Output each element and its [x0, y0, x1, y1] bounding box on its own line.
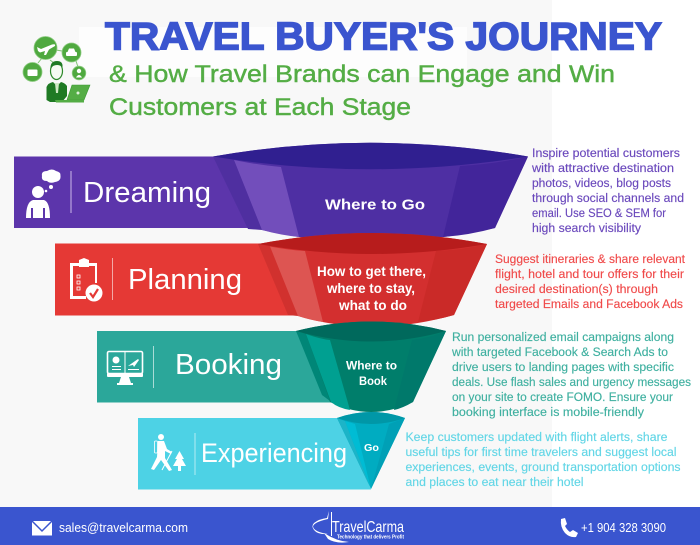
email: sales@travelcarma.com [59, 521, 188, 535]
label: how to get there: How to get there, [317, 264, 426, 279]
icon: booking monitor [107, 352, 143, 385]
label: Where to Go: Where to Go [325, 196, 425, 214]
text: planning description: desired destination(s) through [495, 282, 658, 296]
text: booking description: deals. Use flash sales and urgency messages [452, 375, 691, 389]
text: dreaming description: with attractive destination [531, 161, 674, 175]
subtitle: & How Travel Brands can Engage and Win [109, 61, 615, 88]
icon: travel agent with laptop [23, 36, 90, 102]
text: experiencing description: and places to eat near their hotel [406, 475, 584, 489]
phone number: +1 904 328 3090 [581, 521, 666, 535]
logo: TravelCarma: Technology that delivers Profit [337, 534, 404, 540]
text: dreaming description: email. Use SEO & SEM for [532, 206, 666, 220]
label: Go: Go [364, 442, 379, 454]
label: how to get there: what to do [338, 298, 407, 313]
panel: experiencing banner [138, 418, 371, 490]
label: where to book [346, 360, 397, 388]
icon: clipboard with check [70, 258, 102, 302]
label: Dreaming: Dreaming [83, 177, 211, 209]
footer [0, 507, 700, 545]
text: booking description: drive users to landing pages with specific [452, 360, 674, 374]
panel: planning banner [55, 244, 298, 316]
text: experiencing description: Keep customers updated with flight alerts, share [406, 430, 668, 444]
text: planning description: targeted Emails and Facebook Ads [495, 297, 683, 311]
text: experiencing description [406, 430, 680, 489]
text: booking description: with targeted Facebook & Search Ads to [451, 345, 668, 359]
title: TRAVEL BUYER'S JOURNEY [105, 16, 662, 58]
text: dreaming description: photos, videos, blog posts [532, 176, 671, 190]
label: Planning: Planning [128, 264, 242, 296]
text: booking description: booking interface is mobile-friendly [452, 405, 645, 419]
label: Booking: Booking [175, 349, 282, 381]
text: planning description: Suggest itineraries & share relevant [495, 252, 686, 266]
panel: booking banner [97, 331, 332, 402]
text: dreaming description [531, 146, 684, 235]
text: booking description [451, 330, 691, 419]
logo: TravelCarma: TravelCarma [332, 519, 404, 536]
text: dreaming description: high search visibility [532, 221, 642, 235]
funnel: experiencing stage [337, 412, 405, 489]
logo: TravelCarma [312, 511, 404, 543]
text: experiencing description: useful tips for first time travelers and suggest local [406, 445, 676, 459]
funnel: booking stage [296, 322, 446, 412]
icon: phone [561, 518, 578, 537]
label: where to book: Book [359, 376, 388, 388]
label: how to get there [317, 264, 426, 313]
label: where to book: Where to [346, 360, 397, 372]
label: Experiencing: Experiencing [201, 438, 347, 468]
text: dreaming description: Inspire potential customers [532, 146, 680, 160]
text: booking description: Run personalized email campaigns along [452, 330, 674, 344]
icon: hiker and tree [151, 434, 186, 471]
text: planning description [495, 252, 686, 311]
icon: person dreaming [26, 170, 61, 218]
funnel: planning stage [258, 233, 487, 327]
icon: envelope [32, 521, 52, 536]
panel: dreaming banner [14, 156, 262, 228]
subtitle [109, 61, 615, 121]
text: planning description: flight, hotel and tour offers for their [495, 267, 684, 281]
label: how to get there: where to stay, [326, 281, 415, 296]
funnel: dreaming stage [213, 143, 528, 242]
text: experiencing description: experiences, events, ground transportation options [406, 460, 680, 474]
subtitle: Customers at Each Stage [109, 94, 411, 121]
text: booking description: on your site to create FOMO. Ensure your [452, 390, 673, 404]
text: dreaming description: through social channels and [532, 191, 684, 205]
